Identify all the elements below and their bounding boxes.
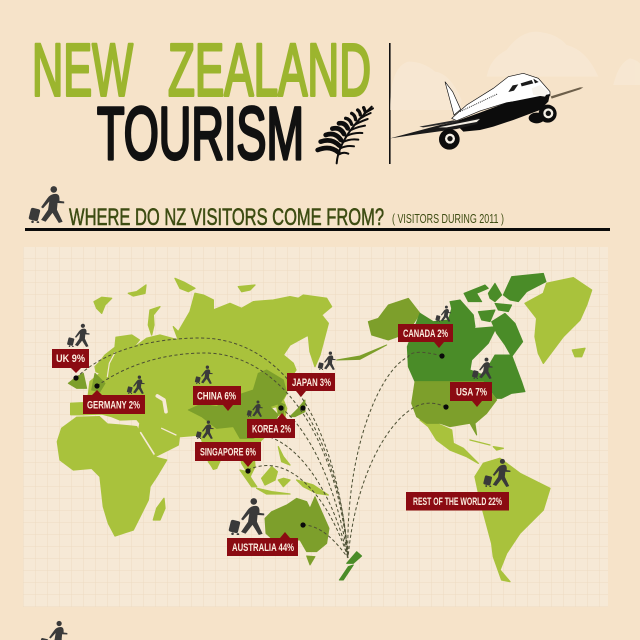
- icon: traveller in heading: [28, 186, 64, 224]
- callout: Korea: [247, 400, 295, 438]
- title: New Zealand: ZEALAND: [168, 28, 371, 112]
- callout: Rest of the world: [406, 459, 510, 510]
- callout: Canada: [398, 306, 453, 348]
- callout: Germany: [83, 376, 145, 414]
- callout: Singapore: SINGAPORE 6%: [200, 446, 256, 458]
- region: USA: [412, 382, 497, 435]
- icon: airplane: [390, 73, 583, 150]
- heading rule: [25, 228, 610, 231]
- callout: China: CHINA 6%: [197, 390, 236, 402]
- map: Oceania: [208, 447, 362, 580]
- region: Germany: [92, 373, 105, 392]
- title: New Zealand: NEW: [32, 28, 133, 112]
- callout: USA: USA 7%: [456, 386, 487, 398]
- location dots: [73, 353, 449, 528]
- region: Japan: [290, 400, 305, 417]
- callout: UK: [52, 324, 90, 373]
- map: Americas and Greenland: [337, 298, 550, 582]
- callout: Australia: AUSTRALIA 44%: [232, 542, 294, 554]
- callout: Rest of the world: REST OF THE WORLD 22%: [413, 496, 502, 508]
- region: Alaska: [337, 298, 420, 360]
- callout: Korea: KOREA 2%: [252, 424, 291, 436]
- callout: Singapore: [195, 421, 261, 467]
- region: Canada: [407, 300, 525, 398]
- region: China: [188, 370, 287, 438]
- region: Australia: [265, 497, 329, 565]
- divider: [389, 43, 391, 164]
- map: Europe, Asia and Africa: [57, 278, 332, 536]
- callout: China: [193, 366, 241, 411]
- title: New Zealand: [32, 28, 371, 112]
- callout: USA: [450, 358, 493, 407]
- inland seas: [157, 396, 166, 412]
- heading: where do NZ visitors come from: WHERE DO NZ VISITORS COME FROM?: [69, 204, 384, 231]
- map: Greenland and Arctic Canada: [450, 273, 592, 363]
- callout: Australia: [227, 498, 298, 556]
- callout: Canada: CANADA 2%: [403, 328, 448, 340]
- icon: traveller at next section: [39, 621, 67, 640]
- region: UK: [68, 373, 87, 388]
- callout: Japan: [287, 352, 336, 397]
- icon: silver fern: [318, 107, 373, 163]
- callout: Germany: GERMANY 2%: [87, 400, 140, 412]
- region: New Zealand: [339, 552, 362, 580]
- callout: UK: UK 9%: [56, 353, 85, 365]
- icon: clouds: [390, 32, 640, 110]
- panel: world map: [23, 247, 608, 607]
- subheading: visitors during 2011: ( VISITORS DURING 2011 ): [392, 212, 504, 226]
- title: Tourism: TOURISM: [97, 92, 304, 175]
- region: Korea: [278, 402, 285, 415]
- flight routes: [76, 338, 446, 558]
- callout: Japan: JAPAN 3%: [292, 377, 331, 389]
